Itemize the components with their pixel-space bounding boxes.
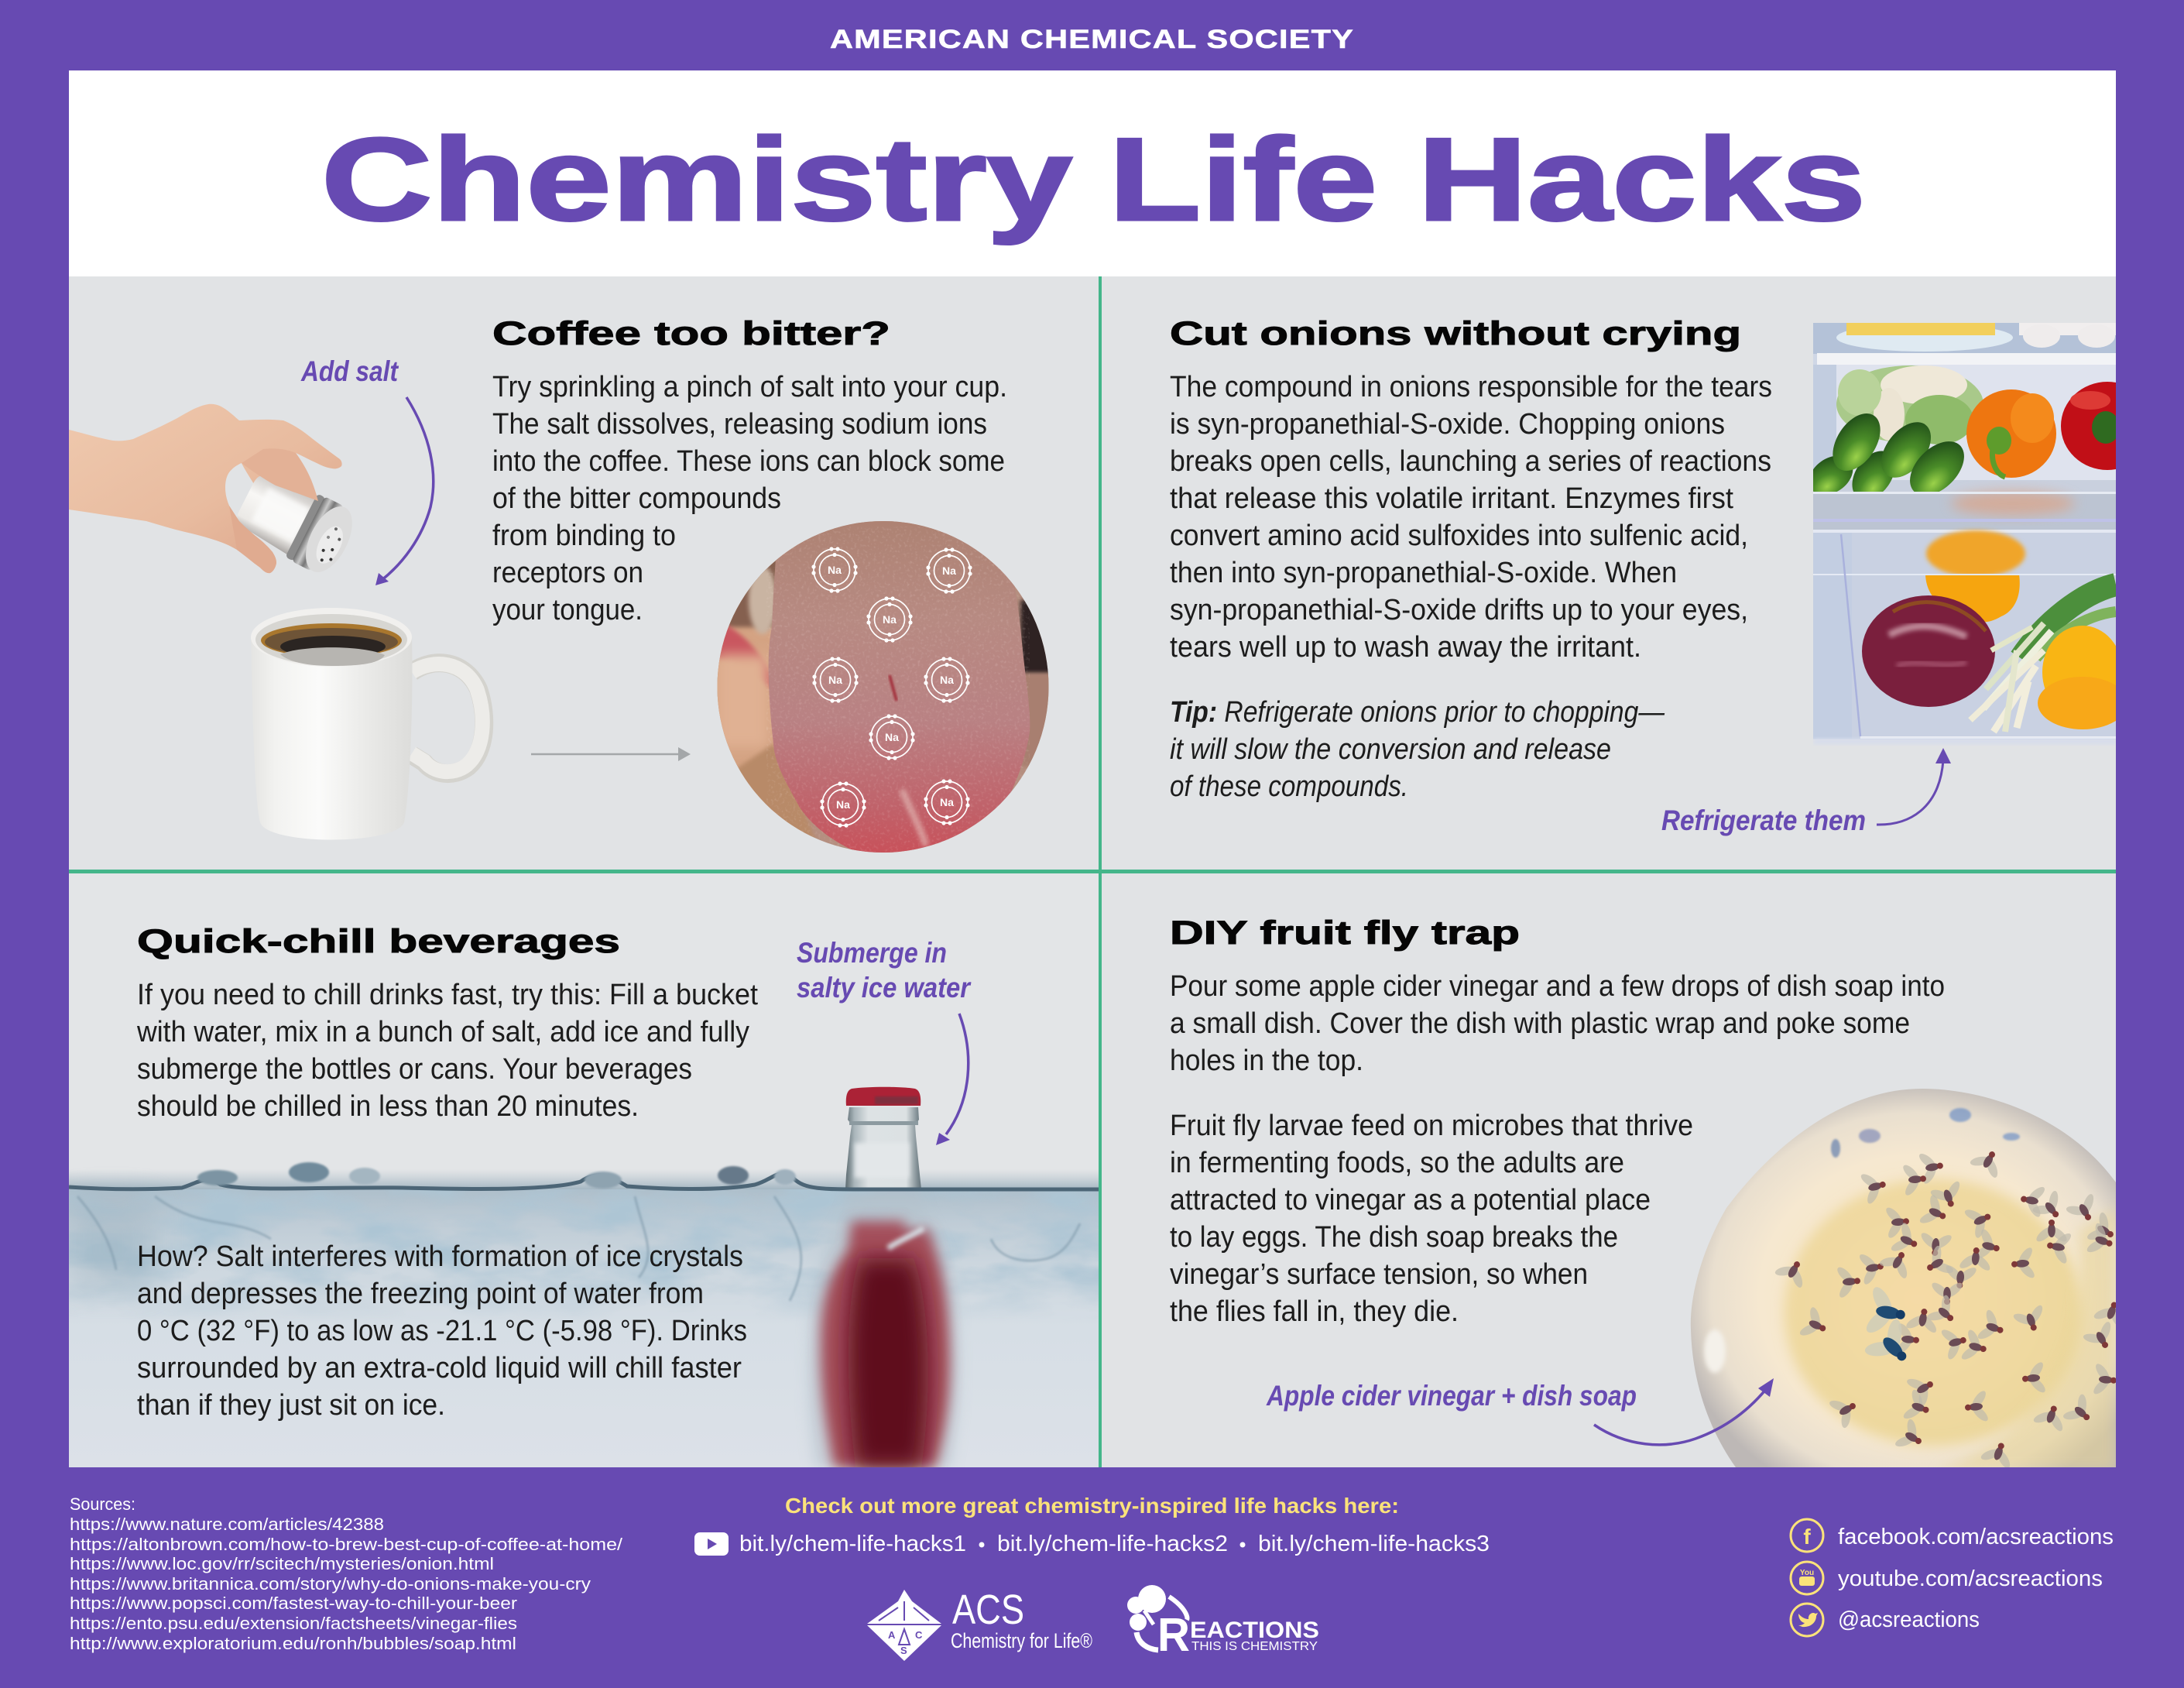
body text [136,979,758,1123]
body text: receptors on [492,557,643,589]
video links: bit.ly/chem-life-hacks3 [1258,1532,1490,1556]
tip text: Tip: Refrigerate onions prior to chopping— [1170,696,1665,729]
explanation text: than if they just sit on ice. [137,1389,445,1422]
body text: Pour some apple cider vinegar and a few drops of dish soap into [1170,970,1945,1003]
body text: is syn-propanethial-S-oxide. Chopping onions [1170,408,1725,441]
sodium ion [812,657,859,703]
body text: a small dish. Cover the dish with plastic wrap and poke some [1170,1007,1910,1040]
social links [1791,1519,2114,1636]
explanation text [137,1240,747,1422]
title: Chemistry [321,114,1072,245]
panel: cut onions [1099,276,2154,870]
icon: youtube [1791,1562,1823,1594]
body text: of the bitter compounds [492,482,781,515]
tip text [1170,696,1665,803]
body text [1170,970,1945,1077]
sources list [70,1494,623,1653]
heading: Quick-chill beverages [137,923,620,960]
sources list: https://altonbrown.com/how-to-brew-best-cup-of-coffee-at-home/ [70,1535,623,1554]
body text: into the coffee. These ions can block some [492,445,1005,478]
arrow: to fridge [1877,748,1951,825]
title band [69,70,2116,276]
sodium ion: Na [828,674,842,686]
callout: submerge: salty ice water [797,972,972,1004]
call to action: more life hacks: Check out more great chemistry-inspired life hacks here: [785,1494,1399,1518]
heading: Cut onions without crying [1170,315,1741,352]
sodium ion: Na [942,564,956,577]
sodium ion: Na [836,798,850,811]
body text: then into syn-propanethial-S-oxide. When [1170,557,1677,589]
callout: refrigerate them: Refrigerate them [1661,805,1866,836]
sodium ion [866,596,913,643]
bottle [807,1087,959,1467]
logo molecule mark: R [1157,1608,1190,1661]
video links: bit.ly/chem-life-hacks1 [739,1532,966,1556]
explanation text: 0 °C (32 °F) to as low as -21.1 °C (-5.98 °F). Drinks [137,1315,747,1347]
sources list: https://www.nature.com/articles/42388 [70,1515,384,1534]
call to action: more life hacks [694,1494,1490,1556]
green onions [1970,585,2116,732]
body text: breaks open cells, launching a series of reactions [1170,445,1771,478]
panel: quick-chill beverages [69,870,1099,1467]
sources list: http://www.exploratorium.edu/ronh/bubbles/soap.html [70,1634,516,1653]
logo wordmark: EACTIONS [1190,1618,1319,1643]
sodium ion: Na [883,613,897,626]
body text [1170,371,1772,664]
explanation text: How? Salt interferes with formation of ice crystals [137,1240,743,1273]
body text: holes in the top. [1170,1045,1363,1077]
sources list: Sources: [70,1494,135,1514]
photo: bottle in icy water [69,1087,1099,1467]
heading: DIY fruit fly trap [1170,914,1520,952]
orange pepper [1966,389,2056,478]
icon: facebook: f [1803,1525,1811,1549]
title: Hacks [1418,114,1866,245]
logo wordmark: ACS [952,1587,1024,1633]
panel dividers [69,276,2116,1467]
video links: bit.ly/chem-life-hacks2 [997,1532,1228,1556]
title [321,114,1866,245]
callout: submerge [797,937,972,1004]
body text: convert amino acid sulfoxides into sulfenic acid, [1170,520,1748,552]
explanation text: vinegar’s surface tension, so when [1170,1258,1588,1291]
body text: syn-propanethial-S-oxide drifts up to your eyes, [1170,594,1748,626]
hand [69,404,342,573]
body text: The compound in onions responsible for the tears [1170,371,1772,403]
explanation text: Fruit fly larvae feed on microbes that thrive [1170,1110,1693,1142]
body text: from binding to [492,520,676,552]
explanation text: and depresses the freezing point of water from [137,1278,704,1310]
sodium ion: Na [940,796,954,808]
logo emblem: A [888,1629,896,1641]
egg carton [2019,323,2116,348]
body text: Try sprinkling a pinch of salt into your cup. [492,371,1007,403]
heading: Coffee too bitter? [492,315,890,352]
logo molecule mark [1127,1585,1190,1661]
body text: tears well up to wash away the irritant. [1170,631,1641,664]
explanation text: in fermenting foods, so the adults are [1170,1147,1624,1179]
sodium ion: Na [828,564,842,576]
body text: that release this volatile irritant. Enzymes first [1170,482,1733,515]
body text [492,371,1007,626]
thumb and finger over glass [229,506,276,573]
arrow: to dish [1594,1378,1774,1445]
yellow pepper [2038,626,2116,729]
logo emblem: S [900,1645,907,1656]
sodium ion [924,657,970,703]
sodium ion: Na [940,674,954,686]
body text: your tongue. [492,594,643,626]
callout: vinegar and soap: Apple cider vinegar + dish soap [1266,1380,1637,1412]
cheese plate [1836,323,2013,352]
ACS logo [867,1587,1092,1661]
red pepper [2061,382,2116,470]
sodium ion [820,781,866,828]
icon: youtube: You [1800,1569,1814,1577]
callout: add salt: Add salt [300,355,399,387]
video links [739,1532,1490,1556]
photo: vegetables in refrigerator [1813,323,2116,743]
explanation text [1170,1110,1693,1328]
sodium ion [811,547,858,593]
header: organisation name: AMERICAN CHEMICAL SOCIETY [830,25,1354,54]
body text: If you need to chill drinks fast, try this: Fill a bucket [137,979,758,1011]
title: Life [1109,114,1377,245]
body text: should be chilled in less than 20 minutes. [137,1090,639,1123]
sources list: https://www.popsci.com/fastest-way-to-chill-your-beer [70,1594,517,1613]
sodium ion [869,714,915,760]
panel: DIY fruit fly trap [1099,870,2131,1472]
icon: facebook [1791,1519,1823,1552]
photo: dish with fruit flies [1688,1084,2131,1472]
youtube handle: youtube.com/acsreactions [1838,1566,2103,1591]
sodium ion [924,779,970,825]
arrow: mug to tongue [531,747,691,761]
explanation text: surrounded by an extra-cold liquid will chill faster [137,1352,742,1384]
salt shaker [230,465,362,580]
explanation text: to lay eggs. The dish soap breaks the [1170,1221,1618,1254]
arrow: salt to mug [375,397,434,585]
sources list: https://www.britannica.com/story/why-do-onions-make-you-cry [70,1574,591,1594]
body text: with water, mix in a bunch of salt, add ice and fully [136,1016,749,1048]
Reactions logo [1127,1585,1319,1661]
tip text: it will slow the conversion and release [1170,733,1611,766]
cauliflower [1836,365,1983,444]
logo emblem: C [915,1629,923,1641]
explanation text: the flies fall in, they die. [1170,1295,1459,1328]
yellow-orange pepper [1925,575,2020,623]
panel: coffee too bitter [69,276,1099,870]
facebook handle: facebook.com/acsreactions [1838,1525,2114,1549]
body text: submerge the bottles or cans. Your beverages [137,1053,692,1086]
icon: video play [694,1532,729,1556]
arrow: to bottle [936,1014,969,1145]
explanation text: attracted to vinegar as a potential place [1170,1184,1651,1216]
photo: coffee mug [251,608,484,839]
cucumbers [1813,413,1964,492]
red cabbage [1862,595,1995,707]
sodium ion: Na [885,731,899,743]
photo: hand holding salt shaker [69,404,362,580]
sources list: https://ento.psu.edu/extension/factsheets/vinegar-flies [70,1614,517,1633]
logo tagline: Chemistry for Life® [951,1629,1092,1652]
sources list: https://www.loc.gov/rr/scitech/mysteries/onion.html [70,1554,494,1573]
sodium ion [926,547,972,594]
body text: The salt dissolves, releasing sodium ions [492,408,987,441]
icon: twitter [1791,1604,1823,1636]
logo emblem [867,1590,941,1661]
twitter handle: @acsreactions [1838,1607,1980,1632]
photo: tongue with sodium ions [716,517,1055,859]
blurred yellow pepper behind drawer [1926,530,2025,577]
water surface with ice [69,1162,1099,1189]
logo tagline: THIS IS CHEMISTRY [1191,1640,1318,1653]
callout: submerge: Submerge in [797,937,947,969]
tip text: of these compounds. [1170,770,1408,803]
